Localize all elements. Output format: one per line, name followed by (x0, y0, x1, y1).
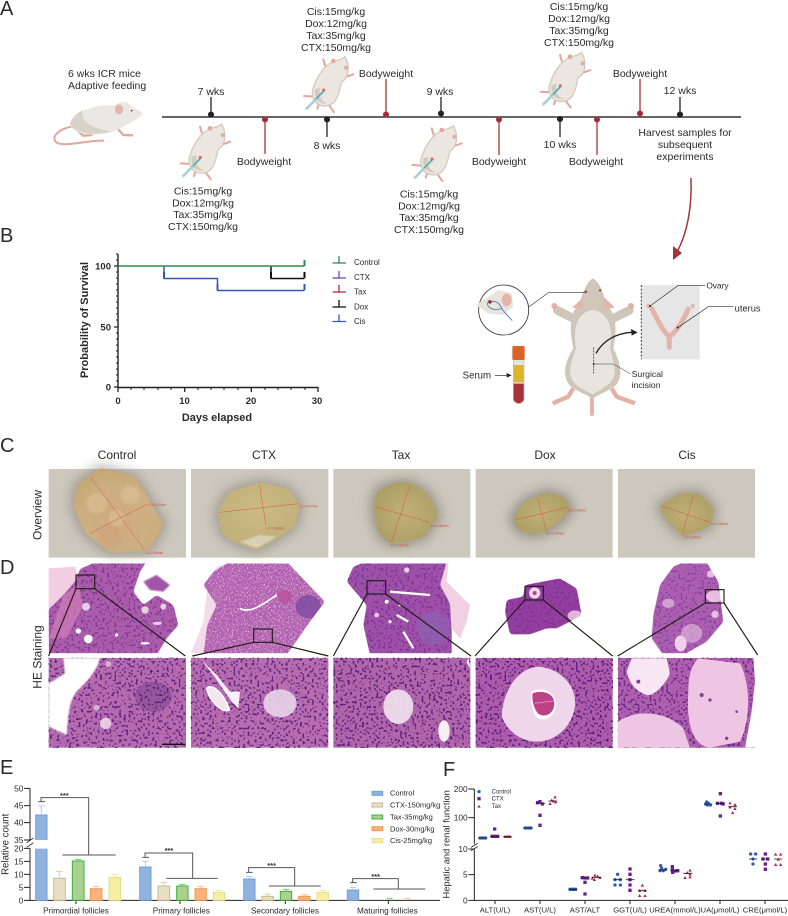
row label HE staining: HE Staining (30, 625, 44, 689)
panel label B: B (0, 225, 13, 247)
panel label E: E (0, 757, 13, 779)
dose block 2 (301, 6, 371, 54)
icon: injected mouse 1 (181, 124, 230, 179)
dose block 2: Dox:12mg/kg (305, 18, 367, 30)
legend: Cis (354, 317, 366, 326)
significance stars: *** (60, 791, 69, 800)
icon: injected mouse 3 (412, 126, 462, 181)
panel: dissection illustration (463, 278, 761, 416)
legend: Cis-25mg/kg (390, 836, 432, 845)
x labels: CRE(μmol/L) (743, 906, 788, 915)
dose block 4: Tax:35mg/kg (549, 25, 609, 37)
legend: Dox (354, 302, 368, 312)
axes (114, 254, 318, 392)
photo: Cis (618, 469, 755, 558)
bars: control (36, 806, 359, 900)
ovary callout (649, 281, 729, 307)
arrow: red curved (673, 178, 691, 260)
bars: Dox (90, 887, 411, 900)
panel label F: F (443, 759, 455, 781)
column headings: Dox (534, 448, 556, 462)
bars: CTX (54, 871, 273, 900)
icon: injected mouse 4 (541, 52, 590, 108)
dose block 2: Tax:35mg/kg (306, 30, 366, 42)
photo: Dox (476, 469, 613, 558)
legend: CTX (492, 797, 504, 803)
panel label D: D (0, 557, 14, 579)
text: mice: 6 wks ICR mice (68, 68, 141, 80)
arrow: incision to uterus (596, 329, 638, 353)
dose block 3: CTX:150mg/kg (394, 224, 464, 236)
dose block 1: Dox:12mg/kg (172, 198, 234, 210)
photo: Tax: L2=1.80mm (431, 524, 449, 528)
legend: Tax-35mg/kg (390, 812, 433, 821)
panel B: survival chart (79, 254, 380, 424)
timeline axis (162, 116, 741, 118)
tick labels: 30 (312, 396, 322, 407)
x labels (480, 906, 788, 915)
y tick labels: 10 (14, 869, 24, 879)
micrograph: Dox (476, 658, 613, 748)
y tick labels: 0 (19, 895, 24, 905)
panel D: histology (49, 563, 758, 748)
x labels: GGT(U/L) (613, 906, 647, 915)
points: Tax (503, 795, 782, 897)
photo: CTX: L2=1.98mm (267, 526, 285, 530)
y tick labels: 200 (454, 784, 468, 794)
y tick labels: 100 (95, 262, 111, 272)
legend: CTX (354, 273, 371, 282)
timeline labels: 9 wks (427, 86, 453, 98)
y tick labels: 5 (463, 870, 468, 880)
legend: Tax (354, 288, 366, 296)
legend: Control (354, 258, 380, 267)
photo: CTX: L1=2.67mm (300, 504, 318, 508)
y tick labels: 40 (14, 818, 24, 828)
timeline labels: Bodyweight (472, 156, 526, 168)
x labels: AST(U/L) (524, 906, 556, 915)
column headings: CTX (252, 448, 276, 462)
text: incision: Surgical (632, 369, 663, 379)
category labels (43, 907, 418, 916)
dose block 1: Tax:35mg/kg (173, 209, 233, 221)
tick labels: 10 (179, 396, 190, 407)
column headings: Control (98, 448, 136, 462)
y tick labels: 20 (14, 843, 24, 853)
dose block 2: CTX:150mg/kg (301, 42, 371, 54)
icon: serum tube (512, 346, 525, 403)
legend: Dox-30mg/kg (390, 824, 435, 833)
dose block 1 (168, 186, 238, 233)
micrograph: Tax (333, 658, 470, 748)
uterus callout (677, 303, 761, 329)
text: serum with arrow: Serum (463, 370, 491, 381)
dose block 3: Tax:35mg/kg (399, 212, 459, 224)
panel label C: C (0, 435, 14, 457)
curves (118, 260, 304, 290)
timeline labels: Bodyweight (359, 68, 413, 80)
micrograph: Control (49, 658, 186, 748)
incision (593, 348, 631, 374)
column headings: Cis (678, 448, 696, 462)
y axis title: Relative count (0, 813, 11, 875)
dose block 3: Dox:12mg/kg (398, 200, 460, 212)
y tick labels: 10 (458, 844, 468, 854)
icon: injected mouse 2 (304, 57, 353, 112)
photo: Control: L2=2.07mm (148, 503, 166, 507)
dose block 2: Cis:15mg/kg (307, 6, 365, 18)
timeline labels: 12 wks (664, 85, 696, 97)
y tick labels: 50 (14, 783, 24, 793)
timeline labels: 7 wks (198, 86, 224, 98)
icon: uterus (646, 304, 695, 348)
tick labels (115, 396, 322, 407)
legend: CTX-150mg/kg (390, 801, 440, 810)
timeline labels: Bodyweight (613, 68, 667, 80)
significance stars: *** (165, 846, 173, 855)
significance brackets (38, 798, 425, 889)
panel F: hepatic and renal function (441, 784, 788, 915)
photo: Cis: L2=1.24mm (683, 536, 701, 540)
section: Tax low power (333, 563, 471, 653)
column headings: Tax (392, 448, 410, 462)
section: CTX low power (191, 563, 328, 653)
tick labels: 0 (115, 396, 121, 407)
dose block 3 (394, 188, 464, 236)
micrograph: Cis (618, 658, 755, 748)
bars: Tax (72, 859, 393, 900)
tick labels: 20 (246, 396, 256, 407)
text: mice (68, 68, 146, 92)
significance stars: *** (267, 861, 276, 870)
timeline labels: 10 wks (544, 139, 576, 151)
icon: side view mouse (54, 102, 143, 144)
y tick labels: 45 (14, 801, 24, 811)
points: CTX (491, 792, 769, 896)
scale bar (162, 744, 185, 745)
legend: Control (492, 790, 511, 796)
photo: Control (49, 468, 186, 558)
y tick labels (95, 262, 111, 394)
dose block 4 (544, 1, 614, 49)
column headings (98, 448, 696, 462)
uterus box (641, 285, 700, 359)
icon: mouse top view (551, 278, 635, 416)
dose block 3: Cis:15mg/kg (400, 188, 458, 200)
zoom lines and boxes (49, 575, 758, 656)
dose block 4: Dox:12mg/kg (548, 13, 610, 25)
y tick labels: 0 (106, 382, 111, 394)
photo: Cis: L1=1.59mm (711, 522, 729, 526)
significance stars: *** (371, 872, 380, 881)
y tick labels (454, 784, 468, 905)
photo: Control: L1=2.85mm (146, 551, 164, 555)
axes (468, 789, 788, 904)
legend (332, 256, 380, 326)
circle inset: head blood draw (476, 285, 586, 335)
x labels: UREA(mmol/L) (649, 906, 701, 915)
x labels: UA(μmol/L) (701, 906, 740, 915)
section: Dox low power (505, 578, 582, 634)
points: control (478, 800, 757, 891)
category labels: Primary follicles (153, 907, 210, 916)
y tick labels: 0 (463, 895, 468, 905)
panel E: follicle bar chart (0, 783, 440, 916)
section: Control low power (49, 563, 186, 653)
text: incision (632, 369, 663, 390)
y tick labels: 35 (14, 835, 24, 845)
legend: Tax (492, 804, 501, 810)
y tick labels: 5 (19, 882, 24, 892)
text: harvest (638, 127, 732, 163)
row label overview: Overview (30, 490, 44, 540)
x axis title: Days elapsed (182, 412, 252, 424)
photo: CTX (191, 469, 328, 558)
category labels: Maturing follicles (357, 907, 418, 916)
y tick labels: 15 (14, 856, 24, 866)
timeline labels (198, 68, 696, 168)
photo: Tax (333, 469, 470, 558)
panel A: experimental timeline (54, 1, 741, 260)
median lines (478, 801, 782, 890)
dose block 1: CTX:150mg/kg (168, 221, 238, 233)
legend: Control (390, 789, 414, 798)
x labels: AST/ALT (570, 906, 601, 915)
text: harvest: experiments (656, 151, 714, 163)
dose block 4: Cis:15mg/kg (550, 1, 608, 13)
photo: Tax: L1=1.82mm (391, 543, 409, 547)
text: harvest: Harvest samples for (638, 127, 732, 139)
bodyweight markers (263, 79, 642, 155)
y tick labels (14, 783, 24, 905)
micrograph: CTX (191, 658, 328, 748)
text: harvest: subsequent (658, 139, 712, 151)
text: serum with arrow (463, 370, 512, 381)
section: Cis low power (650, 563, 725, 653)
category labels: Primordial follicles (43, 907, 109, 916)
text: mice: Adaptive feeding (68, 80, 146, 92)
y tick labels: 100 (454, 813, 468, 823)
dose block 1: Cis:15mg/kg (174, 186, 232, 198)
week markers (209, 97, 682, 137)
timeline labels: Bodyweight (237, 156, 291, 168)
timeline labels: 8 wks (314, 140, 340, 152)
category labels: Secondary follicles (251, 907, 319, 916)
photo: Dox: L2=1.00mm (547, 531, 565, 535)
legend (372, 789, 440, 845)
bars: Cis (109, 874, 328, 900)
timeline labels: Bodyweight (569, 156, 623, 168)
photo: Dox: L1=1.42mm (568, 509, 586, 513)
y tick labels: 50 (100, 322, 111, 334)
uterus callout: uterus (735, 303, 761, 313)
text: incision: incision (632, 380, 661, 390)
legend (477, 790, 511, 810)
y axis title: Probability of Survival (79, 262, 91, 378)
y axis title: Hepatic and renal function (441, 790, 451, 899)
x labels: ALT(U/L) (480, 906, 511, 915)
ovary callout: Ovary (706, 281, 729, 291)
panel C: ovary photos (49, 468, 755, 558)
significance stars (60, 791, 380, 881)
dose block 4: CTX:150mg/kg (544, 37, 614, 49)
axes (24, 788, 440, 904)
